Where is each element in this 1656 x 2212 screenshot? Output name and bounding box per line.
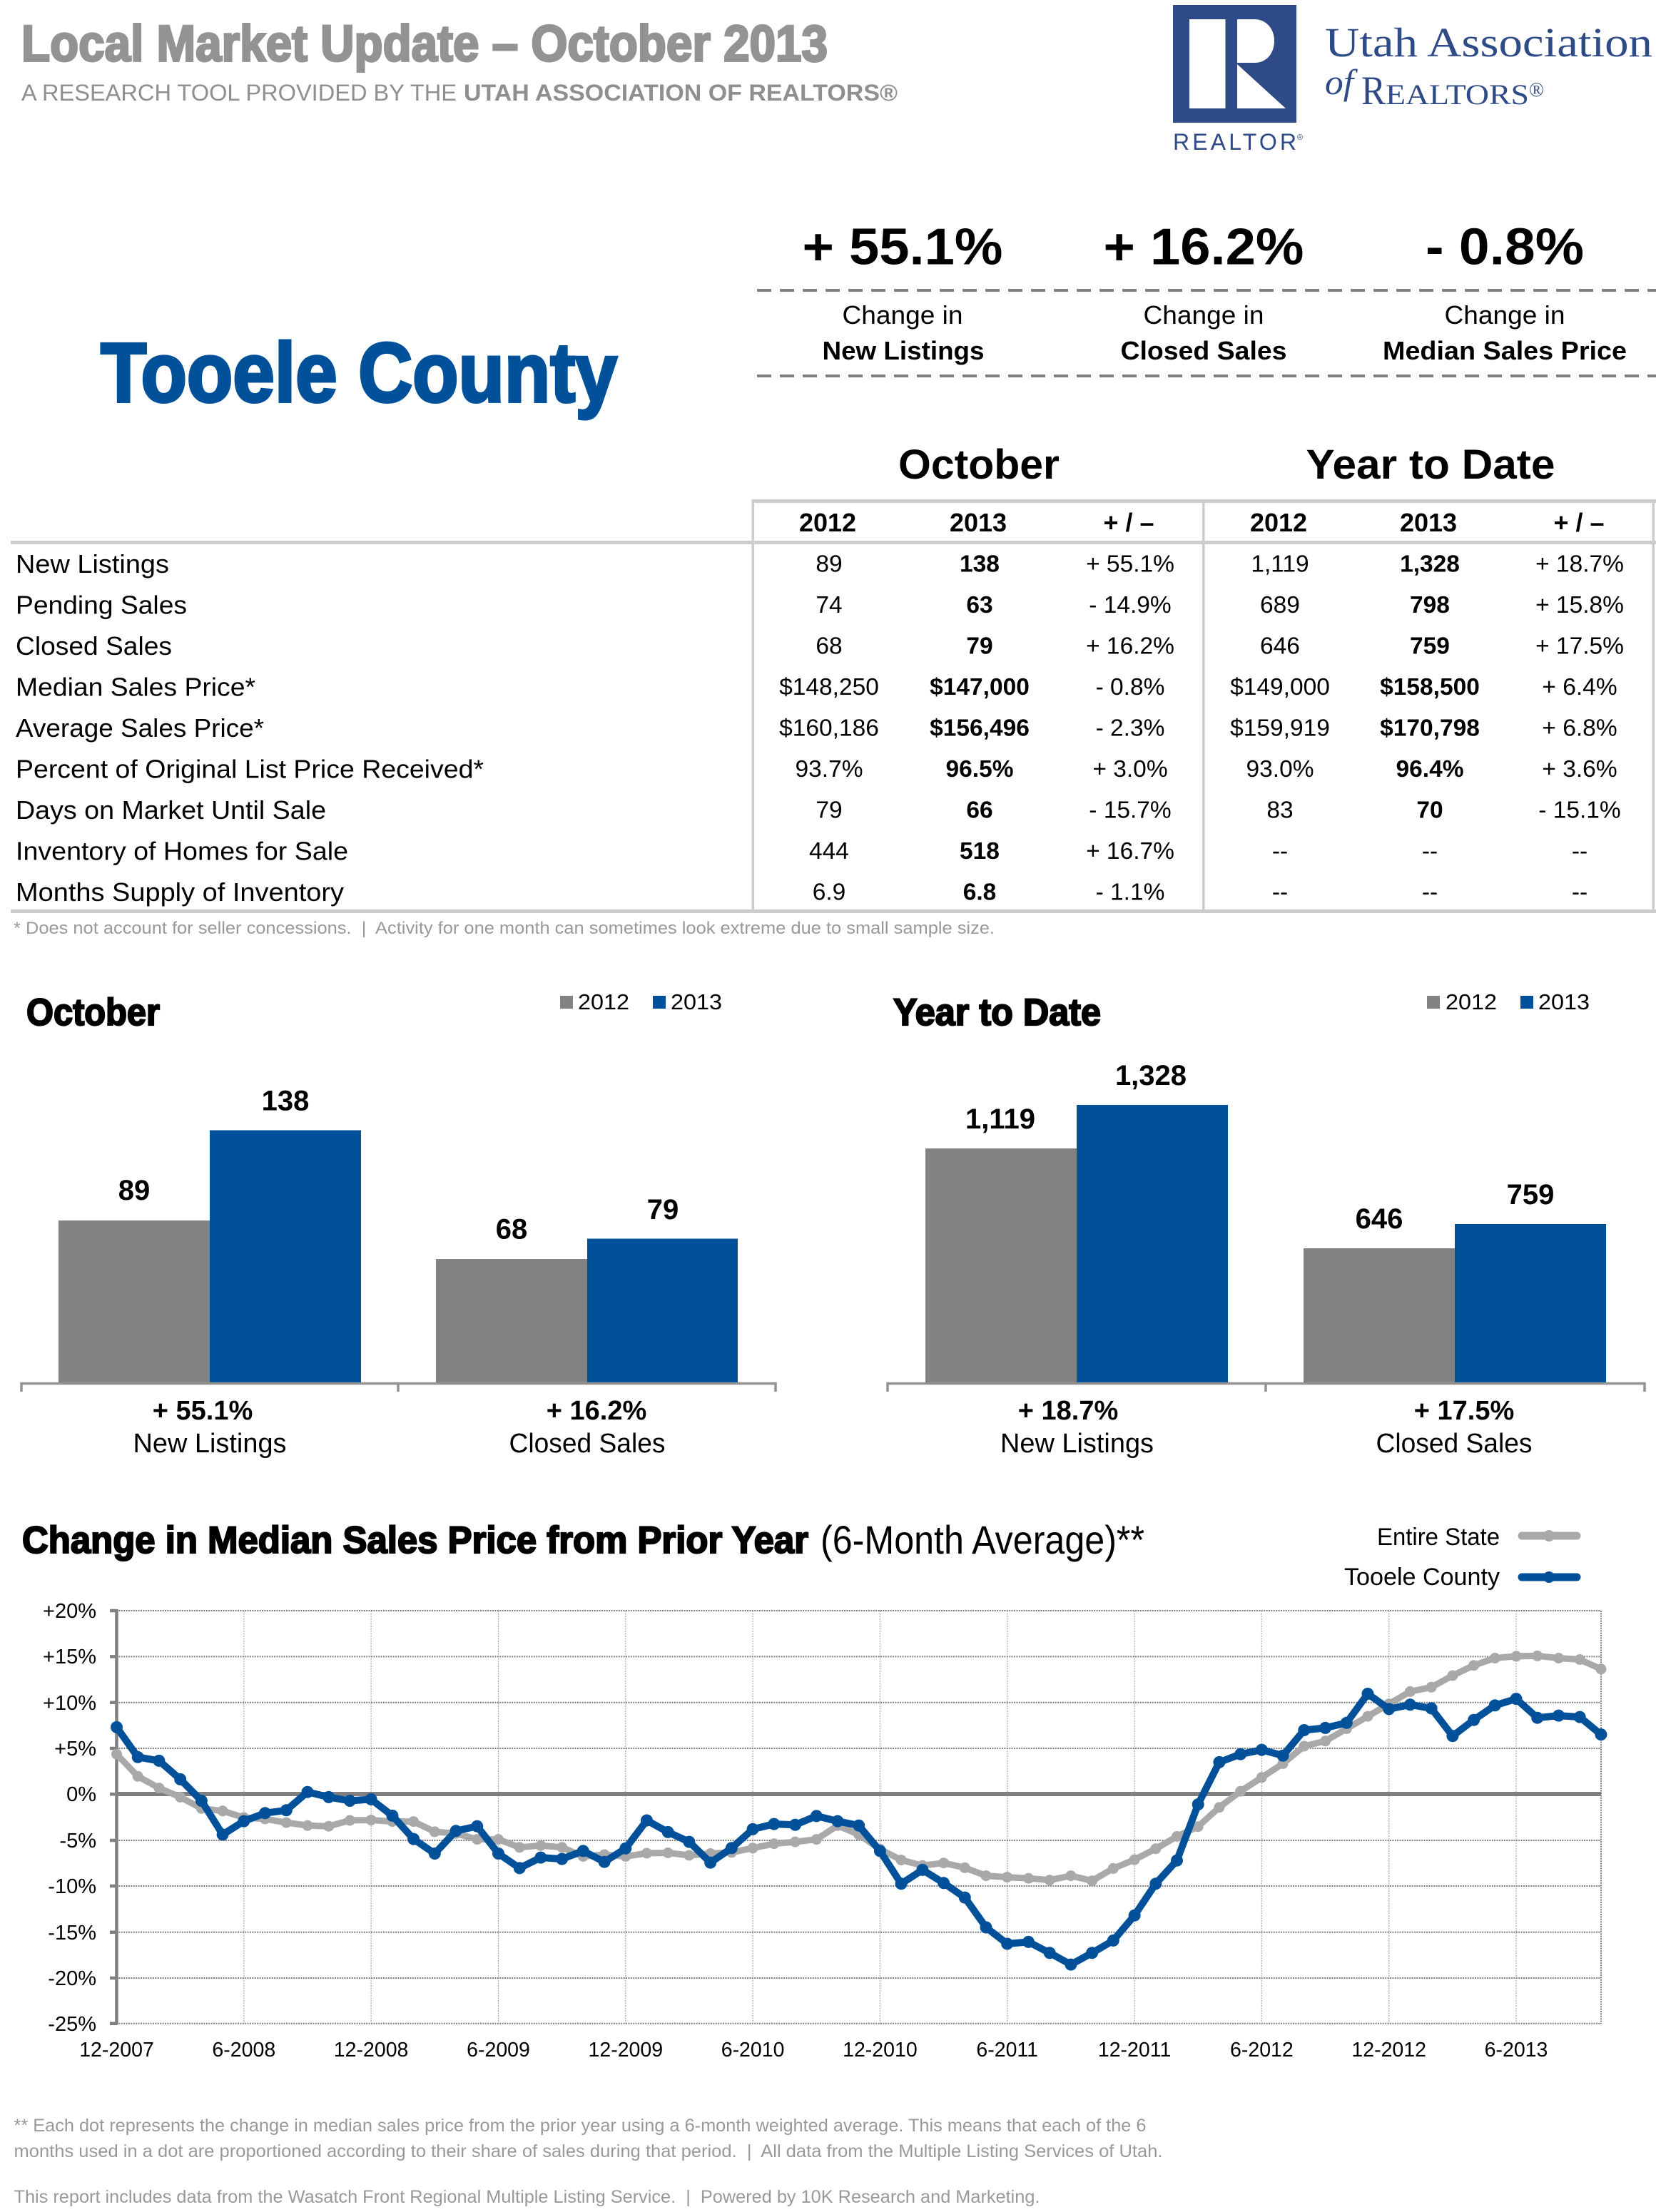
row: New Listings: 1,119	[1251, 551, 1309, 578]
row: Months Supply of Inventory: 6.9	[813, 879, 845, 906]
heading: Year to Date: Year to Date	[893, 992, 1101, 1034]
chart heading: Change in Median Sales Price from Prior Year	[22, 1519, 808, 1561]
row: Months Supply of Inventory: Months Supply of Inventory	[16, 877, 344, 907]
category label: Closed Sales: Closed Sales	[509, 1429, 665, 1459]
x axis labels: 6-2008	[212, 2039, 275, 2061]
row: Inventory of Homes for Sale: --	[1422, 838, 1438, 865]
bars: Closed Sales: 79	[647, 1194, 679, 1225]
header: report title	[21, 16, 898, 106]
row: Pending Sales: 798	[1410, 592, 1450, 618]
row: Closed Sales: 759	[1410, 633, 1450, 659]
row: Closed Sales: + 17.5%	[1535, 633, 1624, 659]
row: Percent of Original List Price Received: + 3.6%	[1542, 756, 1617, 783]
row: New Listings: + 55.1%	[1086, 551, 1174, 578]
chart heading: (6-Month Average)**	[821, 1517, 1144, 1562]
x axis labels: 12-2008	[334, 2039, 408, 2061]
y axis labels: -10%	[48, 1875, 96, 1898]
row: Average Sales Price: $159,919	[1230, 715, 1330, 742]
row: Median Sales Price: $147,000	[930, 674, 1030, 700]
stat: closed sales: + 16.2%	[1103, 218, 1304, 275]
row: New Listings: + 18.7%	[1535, 551, 1624, 578]
footnote: methodology	[14, 2116, 1163, 2161]
logo: Utah Association of Realtors: Utah Association	[1325, 19, 1652, 66]
row: Pending Sales: 63	[966, 592, 993, 618]
row: Median Sales Price: $148,250	[779, 674, 879, 700]
stat: closed sales	[1103, 218, 1304, 365]
table header row: 2012	[799, 508, 856, 537]
row: Percent of Original List Price Received: + 3.0%	[1092, 756, 1168, 783]
footnote: data sources: This report includes data from the Wasatch Front Regional Multiple Listing Service. | Powered by 10K Research and Marketing.	[14, 2187, 1040, 2207]
x axis labels: 6-2013	[1485, 2039, 1548, 2061]
row: Percent of Original List Price Received: 96.4%	[1396, 756, 1464, 783]
panel: data table	[11, 442, 1656, 913]
row: Average Sales Price: + 6.8%	[1542, 715, 1617, 742]
bars: New Listings: 1,328	[1115, 1060, 1187, 1091]
row: Average Sales Price: $160,186	[779, 715, 879, 742]
category label: New Listings: + 55.1%	[153, 1396, 253, 1426]
chart legend: 2012	[578, 989, 629, 1014]
heading: October: October	[26, 992, 160, 1034]
category label: Closed Sales: Closed Sales	[1376, 1429, 1533, 1459]
table header row: 2013	[950, 508, 1007, 537]
logo: Utah Association of Realtors: REALTOR	[1173, 129, 1296, 155]
logo: Utah Association of Realtors: R	[1361, 68, 1386, 113]
header: report title: Local Market Update – October 2013	[21, 16, 828, 73]
row: Average Sales Price: - 2.3%	[1096, 715, 1164, 742]
row: Inventory of Homes for Sale: --	[1572, 838, 1588, 865]
row: Inventory of Homes for Sale: --	[1272, 838, 1288, 865]
x axis labels: 6-2011	[976, 2039, 1038, 2061]
row: Average Sales Price	[16, 713, 1617, 743]
row: Days on Market Until Sale: 79	[816, 797, 843, 823]
row: Percent of Original List Price Received: 93.0%	[1246, 756, 1314, 783]
row: New Listings: 138	[960, 551, 1000, 578]
row: Average Sales Price: $170,798	[1380, 715, 1480, 742]
category label: New Listings: New Listings	[133, 1429, 287, 1459]
row: New Listings: 89	[816, 551, 843, 578]
row: Percent of Original List Price Received: Percent of Original List Price Received*	[16, 755, 484, 783]
row: Pending Sales: - 14.9%	[1089, 592, 1172, 618]
panel: data table: October	[898, 442, 1060, 488]
row: Percent of Original List Price Received: 93.7%	[795, 756, 863, 783]
row: Median Sales Price: $149,000	[1230, 674, 1330, 700]
bars: New Listings	[925, 1060, 1228, 1382]
category label: Closed Sales	[509, 1396, 665, 1459]
stat: closed sales: Closed Sales	[1120, 336, 1287, 365]
row: Days on Market Until Sale: - 15.7%	[1089, 797, 1172, 823]
line legend: Tooele County	[1344, 1564, 1500, 1591]
row: Median Sales Price	[16, 672, 1617, 702]
bars: Closed Sales: 68	[496, 1214, 527, 1245]
row: Average Sales Price: Average Sales Price*	[16, 713, 264, 743]
row: Percent of Original List Price Received	[16, 755, 1617, 783]
x axis labels: 12-2010	[843, 2039, 918, 2061]
stat: median sales price	[1383, 218, 1627, 365]
category label: Closed Sales: + 17.5%	[1414, 1396, 1514, 1426]
x axis labels: 12-2012	[1351, 2039, 1426, 2061]
row: Months Supply of Inventory: --	[1572, 879, 1588, 906]
footnote: methodology: ** Each dot represents the change in median sales price from the prior year using a 6-month weighted average. This means that each of the 6	[14, 2116, 1146, 2136]
y axis labels: -20%	[48, 1967, 96, 1990]
stat: median sales price: Median Sales Price	[1383, 336, 1627, 365]
stat: new listings: New Listings	[822, 336, 985, 365]
table header row: 2012	[1250, 508, 1307, 537]
chart heading	[22, 1517, 1144, 1562]
stat: median sales price: Change in	[1444, 300, 1565, 330]
line legend	[1344, 1524, 1577, 1591]
category label: New Listings: New Listings	[1000, 1429, 1154, 1459]
row: Inventory of Homes for Sale: Inventory of Homes for Sale	[16, 836, 348, 866]
row: Inventory of Homes for Sale: 518	[960, 838, 1000, 865]
row: Closed Sales: 79	[966, 633, 993, 659]
x axis labels: 6-2012	[1230, 2039, 1294, 2061]
row: Days on Market Until Sale: - 15.1%	[1538, 797, 1621, 823]
table header row: 2013	[1400, 508, 1457, 537]
y axis labels: -5%	[59, 1830, 96, 1852]
bars: New Listings: 89	[118, 1175, 150, 1206]
line series: Entire State	[117, 1656, 1601, 1881]
stat: new listings: Change in	[842, 300, 963, 330]
table header row: + / –	[1103, 508, 1154, 537]
panel: median sales price line chart	[22, 1517, 1601, 2061]
row: Closed Sales: + 16.2%	[1086, 633, 1174, 659]
row: Days on Market Until Sale: 83	[1266, 797, 1294, 823]
y axis labels	[43, 1600, 96, 2036]
y axis labels: -25%	[48, 2013, 96, 2036]
row: Days on Market Until Sale: 70	[1416, 797, 1443, 823]
panel: Year to Date bar chart	[888, 989, 1645, 1459]
row: Inventory of Homes for Sale: 444	[809, 838, 849, 865]
category label: Closed Sales: + 16.2%	[547, 1396, 646, 1426]
panel: October bar chart	[21, 989, 776, 1459]
panel: key change statistics	[757, 218, 1656, 376]
row: Median Sales Price: $158,500	[1380, 674, 1480, 700]
county name heading: Tooele County	[101, 326, 617, 420]
table header row	[799, 508, 1605, 537]
row: Pending Sales	[16, 591, 1624, 619]
chart legend	[1427, 989, 1590, 1014]
row: Average Sales Price: $156,496	[930, 715, 1030, 742]
y axis labels: -15%	[48, 1922, 96, 1945]
chart legend: 2013	[1538, 989, 1590, 1014]
logo: Utah Association of Realtors	[1173, 5, 1652, 155]
logo: Utah Association of Realtors: ®	[1529, 79, 1544, 101]
row: Days on Market Until Sale	[16, 795, 1621, 825]
row: Median Sales Price: Median Sales Price*	[16, 672, 255, 702]
chart legend: 2012	[1446, 989, 1497, 1014]
row: New Listings: 1,328	[1400, 551, 1460, 578]
logo: Utah Association of Realtors: EALTORS	[1386, 78, 1529, 111]
y axis labels: +15%	[43, 1646, 96, 1668]
row: New Listings	[16, 549, 1624, 579]
logo: Utah Association of Realtors: ®	[1297, 133, 1303, 142]
row: Inventory of Homes for Sale: + 16.7%	[1086, 838, 1174, 865]
table header row: + / –	[1553, 508, 1605, 537]
bars: Closed Sales: 646	[1356, 1203, 1403, 1235]
bars: Closed Sales: 759	[1507, 1179, 1554, 1211]
row: Closed Sales: 68	[816, 633, 843, 659]
y axis labels: 0%	[66, 1783, 96, 1806]
row: Percent of Original List Price Received: 96.5%	[946, 756, 1013, 783]
bars: New Listings	[59, 1086, 361, 1382]
x axis labels: 12-2009	[589, 2039, 663, 2061]
row: Inventory of Homes for Sale	[16, 836, 1588, 866]
bars: Closed Sales	[436, 1194, 738, 1382]
row: Pending Sales: 689	[1260, 592, 1300, 618]
bars: Closed Sales	[1304, 1179, 1606, 1382]
stat: new listings	[802, 218, 1003, 365]
x axis labels: 6-2009	[467, 2039, 530, 2061]
row: Months Supply of Inventory: 6.8	[963, 879, 996, 906]
row: Closed Sales: 646	[1260, 633, 1300, 659]
logo: Utah Association of Realtors: of	[1325, 62, 1358, 102]
line series: Tooele County	[117, 1693, 1601, 1964]
row: Months Supply of Inventory: --	[1422, 879, 1438, 906]
category label: New Listings	[133, 1396, 287, 1459]
row: Pending Sales: Pending Sales	[16, 591, 187, 619]
row: Closed Sales	[16, 631, 1624, 661]
icon: realtor R block	[1173, 5, 1296, 123]
row: Pending Sales: + 15.8%	[1535, 592, 1624, 618]
stat: closed sales: Change in	[1143, 300, 1264, 330]
x axis labels	[79, 2039, 1548, 2061]
category label: New Listings: + 18.7%	[1018, 1396, 1118, 1426]
y axis labels: +10%	[43, 1692, 96, 1715]
row: Months Supply of Inventory: - 1.1%	[1096, 879, 1164, 906]
x axis labels: 6-2010	[721, 2039, 784, 2061]
bars: New Listings: 138	[262, 1086, 309, 1117]
row: Months Supply of Inventory: --	[1272, 879, 1288, 906]
panel: data table: Year to Date	[1306, 442, 1555, 488]
row: Days on Market Until Sale: 66	[966, 797, 993, 823]
chart legend: 2013	[671, 989, 722, 1014]
row: Pending Sales: 74	[816, 592, 843, 618]
x axis labels: 12-2007	[79, 2039, 154, 2061]
x axis labels: 12-2011	[1098, 2039, 1171, 2061]
header: report title: UTAH ASSOCIATION OF REALTORS®	[464, 80, 898, 106]
table footnote: * Does not account for seller concessions. | Activity for one month can sometimes look extreme due to small sample size.	[14, 919, 995, 938]
row: Median Sales Price: + 6.4%	[1542, 674, 1617, 700]
stat: median sales price: - 0.8%	[1426, 218, 1584, 275]
bars: New Listings: 1,119	[965, 1104, 1035, 1135]
row: Median Sales Price: - 0.8%	[1096, 674, 1164, 700]
y axis labels: +20%	[43, 1600, 96, 1623]
category label: New Listings	[1000, 1396, 1154, 1459]
header: report title: A RESEARCH TOOL PROVIDED BY THE	[21, 80, 457, 106]
category label: Closed Sales	[1376, 1396, 1533, 1459]
row: Closed Sales: Closed Sales	[16, 631, 172, 661]
row: Months Supply of Inventory	[16, 877, 1588, 907]
chart legend	[560, 989, 722, 1014]
footnote: methodology: months used in a dot are proportioned according to their share of sales during that period. | All data from the Multiple Listing Services of Utah.	[14, 2141, 1163, 2161]
y axis labels: +5%	[54, 1738, 96, 1760]
row: Days on Market Until Sale: Days on Market Until Sale	[16, 795, 326, 825]
row: New Listings: New Listings	[16, 549, 169, 579]
stat: new listings: + 55.1%	[802, 218, 1003, 275]
line legend: Entire State	[1377, 1524, 1500, 1551]
